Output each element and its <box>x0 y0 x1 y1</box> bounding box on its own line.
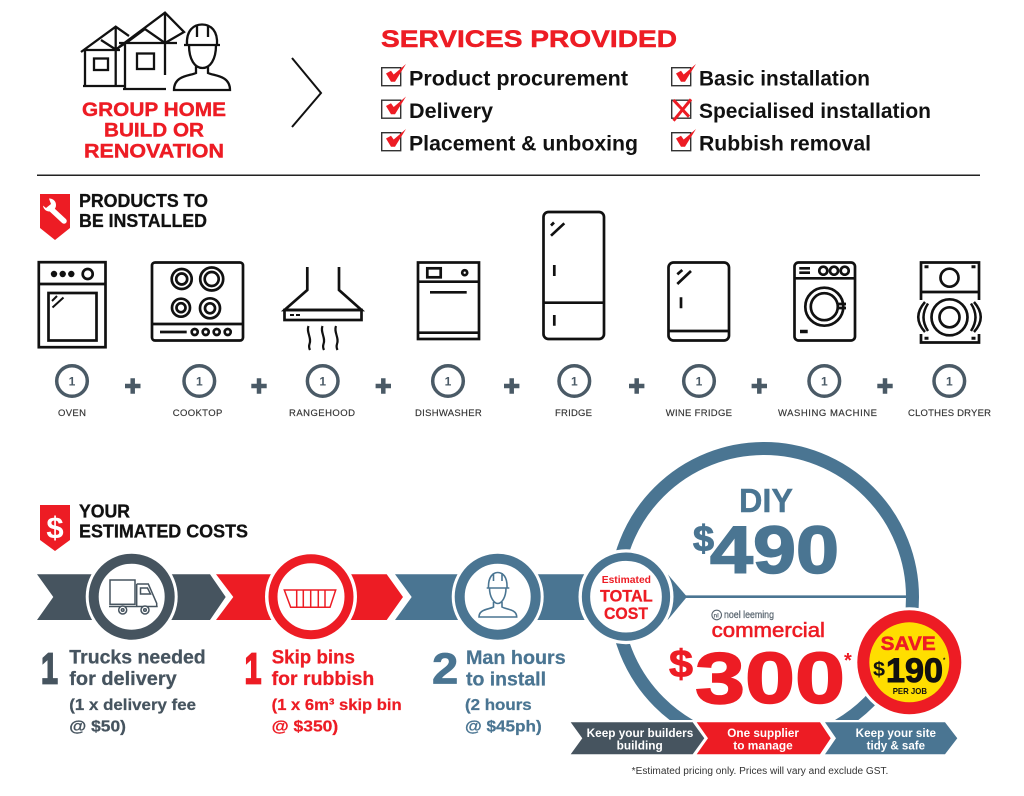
callout: estimated total cost: COST <box>604 604 649 623</box>
text: labour cost <box>432 644 566 736</box>
arrow: one supplier to manage: to manage <box>733 740 793 752</box>
text: delivery cost: 1 <box>41 644 58 693</box>
text: quantities: 1 <box>445 374 452 388</box>
icon: houses and builder <box>81 13 230 90</box>
text: delivery cost: (1 x delivery fee <box>69 697 196 714</box>
text: product labels: WINE FRIDGE <box>666 408 732 419</box>
text: labour cost: @ $45ph) <box>465 719 542 736</box>
heading: group home build or renovation: BUILD OR <box>104 120 204 142</box>
text: product labels: COOKTOP <box>173 408 222 419</box>
divider line: DIY versus commercial <box>680 595 908 598</box>
icon: truck circle <box>86 551 178 643</box>
arrow: keep your builders building: Keep your builders <box>587 728 693 740</box>
chart: big total cost ring <box>616 448 912 746</box>
text: DIY price: $ <box>693 518 714 559</box>
text: delivery cost: Trucks needed <box>69 648 206 668</box>
text: labour cost: (2 hours <box>465 697 532 714</box>
text: DIY price: 490 <box>710 513 839 588</box>
heading: group home build or renovation <box>82 99 226 162</box>
icon: oven <box>39 262 105 347</box>
callout: save 190 per job: 190 <box>886 652 943 690</box>
text: service list: Placement & unboxing <box>409 132 638 156</box>
text: commercial price <box>669 639 852 719</box>
text: product labels: WASHING MACHINE <box>778 408 877 419</box>
text: service list: Delivery <box>409 100 493 123</box>
text: product labels: OVEN <box>58 408 86 419</box>
text: quantities: 1 <box>946 374 953 388</box>
callout: estimated total cost: Estimated <box>602 574 651 586</box>
text: skip bin cost <box>244 644 402 736</box>
arrow: keep your builders building <box>571 722 704 754</box>
heading: services provided: SERVICES PROVIDED <box>381 26 677 53</box>
callout: save 190 per job: SAVE <box>881 634 936 655</box>
icon: builder circle <box>452 551 544 643</box>
icon: quantity circles <box>57 366 965 396</box>
text: product labels: CLOTHES DRYER <box>908 408 991 419</box>
text: quantities: 1 <box>196 374 203 388</box>
arrow: keep your builders building: building <box>617 740 663 752</box>
icon: dollar badge <box>40 505 70 551</box>
icon: cooktop <box>152 262 243 340</box>
icon: dollar badge: $ <box>46 510 64 545</box>
icon: wine fridge <box>668 262 729 340</box>
heading: products to be installed: PRODUCTS TO <box>79 191 208 211</box>
heading: products to be installed <box>40 191 208 240</box>
text: service list: Basic installation <box>699 68 870 90</box>
callout: estimated total cost <box>578 549 674 644</box>
icon: wrench badge <box>40 194 70 240</box>
text: service list: Rubbish removal <box>699 132 871 156</box>
text: commercial price: * <box>844 650 852 672</box>
text: DIY price <box>693 482 839 588</box>
heading: your estimated costs: ESTIMATED COSTS <box>79 522 248 542</box>
text: commercial price: $ <box>669 643 693 686</box>
icon: clothes dryer <box>918 262 981 342</box>
text: delivery cost: for delivery <box>69 669 177 690</box>
arrow: keep your site tidy and safe: Keep your site <box>856 728 936 740</box>
text: product labels: DISHWASHER <box>415 408 482 419</box>
icon: washing machine <box>794 262 855 340</box>
arrow: chevron to services <box>292 58 321 127</box>
callout: save 190 per job: PER JOB <box>893 686 927 696</box>
callout: save 190 per job: $ <box>873 659 885 681</box>
text: quantities: 1 <box>696 374 703 388</box>
arrow: keep your site tidy and safe: tidy & safe <box>867 740 925 752</box>
text: skip bin cost: 1 <box>244 644 262 693</box>
panel: services provided <box>381 26 931 156</box>
panel: cost ribbon <box>37 574 687 620</box>
arrow: keep your site tidy and safe <box>825 722 957 754</box>
heading: your estimated costs: YOUR <box>79 502 130 522</box>
text: quantities: 1 <box>821 374 828 388</box>
icon: plus signs <box>125 378 893 394</box>
text: delivery cost: @ $50) <box>69 719 126 736</box>
heading: group home build or renovation: RENOVATION <box>84 140 224 162</box>
arrow: one supplier to manage: One supplier <box>727 728 800 740</box>
panel: product quantities <box>57 366 991 419</box>
icon: fridge <box>544 212 604 339</box>
text: quantities: 1 <box>571 374 578 388</box>
icon: noel leeming logo: noel leeming <box>724 610 774 621</box>
text: quantities <box>69 374 953 388</box>
icon: skip bin circle <box>265 551 357 643</box>
icon: rangehood <box>284 267 362 350</box>
text: product labels: FRIDGE <box>555 408 592 419</box>
heading: your estimated costs <box>40 502 248 551</box>
icon: dishwasher <box>418 262 479 339</box>
text: product labels <box>58 408 991 419</box>
text: product labels: RANGEHOOD <box>289 408 355 419</box>
text: labour cost: Man hours <box>466 648 566 669</box>
text: service list <box>409 68 931 156</box>
text: service list: Product procurement <box>409 68 628 90</box>
callout: save 190 per job <box>854 607 964 717</box>
text: quantities: 1 <box>69 374 76 388</box>
text: skip bin cost: (1 x 6m³ skip bin <box>272 697 402 714</box>
callout: estimated total cost: TOTAL <box>600 587 653 606</box>
heading: group home build or renovation: GROUP HOME <box>82 99 226 121</box>
text: skip bin cost: @ $350) <box>272 719 338 736</box>
text: delivery cost <box>41 644 206 736</box>
heading: products to be installed: BE INSTALLED <box>79 211 207 231</box>
text: skip bin cost: Skip bins <box>272 648 355 668</box>
text: quantities: 1 <box>319 374 326 388</box>
text: commercial price: 300 <box>695 639 845 719</box>
text: service list: Specialised installation <box>699 100 931 123</box>
icon: service check marks <box>382 64 696 151</box>
arrow: one supplier to manage <box>697 722 831 754</box>
text: labour cost: 2 <box>432 644 458 693</box>
text: commercial wordmark: commercial <box>712 620 825 642</box>
callout: save 190 per job: * <box>943 658 946 664</box>
footnote: *Estimated pricing only. Prices will vary and exclude GST. <box>632 766 888 777</box>
panel: benefit arrows <box>571 722 957 754</box>
text: labour cost: to install <box>466 670 546 690</box>
text: DIY price: DIY <box>739 482 793 519</box>
icon: noel leeming logo: nl <box>714 614 719 620</box>
text: skip bin cost: for rubbish <box>272 669 374 690</box>
